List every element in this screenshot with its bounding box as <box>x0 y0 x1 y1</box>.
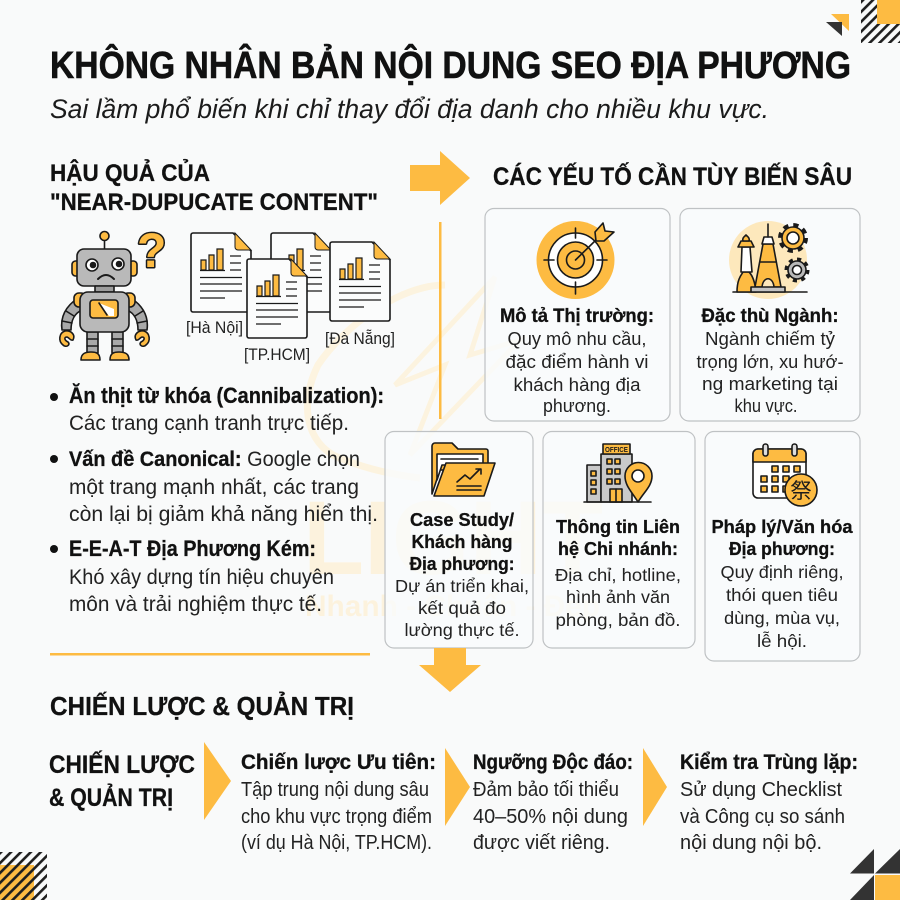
panel: industry specifics: ng marketing tại <box>702 374 838 394</box>
vertical divider <box>439 222 442 419</box>
bullet: cannibalization: Ăn thịt từ khóa (Cannibalization): <box>69 383 384 408</box>
step: uniqueness threshold <box>473 751 633 854</box>
icon: office building with pin <box>584 444 652 502</box>
icon: confused robot <box>60 225 166 360</box>
step: uniqueness threshold: Đảm bảo tối thiểu <box>473 779 619 801</box>
panel: case study: Case Study/ <box>410 509 514 530</box>
icon: landmark and gears <box>729 221 808 299</box>
panel: branch contact information: hình ảnh văn <box>566 587 670 607</box>
step: duplication check <box>680 751 858 854</box>
panel: case study: Địa phương: <box>410 553 514 574</box>
bullet: cannibalization: Các trang cạnh tranh trực tiếp. <box>69 412 349 435</box>
decoration: bottom right corner <box>850 849 900 900</box>
panel: branch contact information: Địa chỉ, hotline, <box>555 565 681 585</box>
bullet: canonical: một trang mạnh nhất, các trang <box>69 476 359 499</box>
panel: industry specifics <box>680 208 860 421</box>
heading: consequences <box>50 158 378 216</box>
panel: industry specifics: khu vực. <box>734 396 798 416</box>
icon: confused robot: ? <box>137 225 166 278</box>
bullet: canonical <box>50 448 378 526</box>
label: Đà Nẵng: [Đà Nẵng] <box>325 329 395 348</box>
label: strategy and governance: CHIẾN LƯỢC <box>49 750 195 779</box>
watermark logo: Nhanh - Chuẩn - Đẹp <box>305 590 600 623</box>
bullet: E-E-A-T: Khó xây dựng tín hiệu chuyên <box>69 566 334 589</box>
horizontal divider <box>50 653 370 656</box>
step: uniqueness threshold: 40–50% nội dung <box>473 806 628 828</box>
heading: consequences: "NEAR-DUPUCATE CONTENT" <box>50 189 378 216</box>
bullet: canonical: còn lại bị giảm khả năng hiển thị. <box>69 503 378 526</box>
watermark logo: LIGHT <box>303 480 603 597</box>
panel: legal and culture <box>705 432 860 661</box>
decoration: bottom left corner <box>0 852 47 900</box>
panel: industry specifics: trọng lớn, xu hướ- <box>696 352 844 372</box>
icon: calendar with festival seal <box>753 444 817 506</box>
list: consequences <box>50 383 384 616</box>
panel: case study: Dự án triển khai, <box>395 576 529 596</box>
bullet: E-E-A-T: môn và trải nghiệm thực tế. <box>69 593 322 616</box>
decoration: top right corner <box>826 0 900 43</box>
icon: calendar with festival seal: 祭 <box>790 475 812 505</box>
panel: case study <box>385 432 533 648</box>
panel: branch contact information: phòng, bản đồ. <box>556 610 680 630</box>
step: duplication check: Sử dụng Checklist <box>680 779 842 801</box>
panel: case study: Khách hàng <box>412 531 512 552</box>
step: priority strategy: cho khu vực trọng điểm <box>241 806 432 828</box>
chevron 2 <box>445 748 470 826</box>
icon: target <box>536 221 614 299</box>
subtitle: Sai lầm phổ biến khi chỉ thay đổi địa danh cho nhiều khu vực. <box>50 94 769 124</box>
icon: office building with pin: OFFICE <box>605 447 628 454</box>
bullet: cannibalization <box>50 383 384 435</box>
panel: legal and culture: thói quen tiêu <box>726 585 838 605</box>
step: uniqueness threshold: được viết riêng. <box>473 832 610 854</box>
panel: market description: Mô tả Thị trường: <box>500 306 654 327</box>
step: priority strategy <box>241 751 436 854</box>
panel: legal and culture: Pháp lý/Văn hóa <box>712 516 853 537</box>
step: priority strategy: (ví dụ Hà Nội, TP.HCM). <box>241 832 432 854</box>
label: strategy and governance <box>49 750 195 812</box>
panel: market description: Quy mô nhu cầu, <box>508 329 646 349</box>
watermark logo <box>303 277 603 623</box>
heading: customization factors: CÁC YẾU TỐ CẦN TÙY BIẾN SÂU <box>493 161 852 191</box>
panel: market description: khách hàng địa <box>514 375 642 395</box>
panel: legal and culture: dùng, mùa vụ, <box>724 608 840 628</box>
panel: branch contact information <box>543 432 695 648</box>
bullet: canonical: Vấn đề Canonical: Google chọn <box>69 448 360 471</box>
panel: market description <box>485 208 670 421</box>
label: strategy and governance: & QUẢN TRỊ <box>49 782 173 812</box>
panel: market description: phương. <box>543 396 611 416</box>
arrow: right <box>410 151 470 205</box>
step: duplication check: nội dung nội bộ. <box>680 832 822 854</box>
heading: consequences: HẬU QUẢ CỦA <box>50 158 210 187</box>
chevron 1 <box>204 742 231 820</box>
arrow: down <box>419 648 481 692</box>
bullet: E-E-A-T <box>50 536 334 616</box>
step: uniqueness threshold: Ngưỡng Độc đáo: <box>473 751 633 774</box>
panel: industry specifics: Đặc thù Ngành: <box>702 306 838 327</box>
panel: industry specifics: Ngành chiếm tỷ <box>705 329 835 349</box>
panel: legal and culture: lễ hội. <box>757 630 807 651</box>
icon: folder with chart <box>432 443 495 496</box>
panel: legal and culture: Quy định riêng, <box>720 562 844 582</box>
panel: legal and culture: Địa phương: <box>729 538 835 559</box>
label: TP.HCM: [TP.HCM] <box>244 345 310 364</box>
bullet: E-E-A-T: E-E-A-T Địa Phương Kém: <box>69 536 316 561</box>
step: duplication check: và Công cụ so sánh <box>680 806 845 828</box>
panel: branch contact information: hệ Chi nhánh: <box>558 538 678 559</box>
panel: case study: kết quả đo <box>418 598 506 618</box>
step: duplication check: Kiểm tra Trùng lặp: <box>680 751 858 774</box>
label: Hà Nội: [Hà Nội] <box>186 318 243 337</box>
panel: branch contact information: Thông tin Liên <box>556 516 680 537</box>
icon: duplicated documents <box>186 233 395 364</box>
chevron 3 <box>643 748 667 826</box>
heading: strategy and governance: CHIẾN LƯỢC & QUẢN TRỊ <box>50 691 354 721</box>
step: priority strategy: Chiến lược Ưu tiên: <box>241 751 436 774</box>
panel: case study: lường thực tế. <box>404 620 520 640</box>
panel: market description: đặc điểm hành vi <box>506 352 648 372</box>
step: priority strategy: Tập trung nội dung sâu <box>241 779 429 801</box>
